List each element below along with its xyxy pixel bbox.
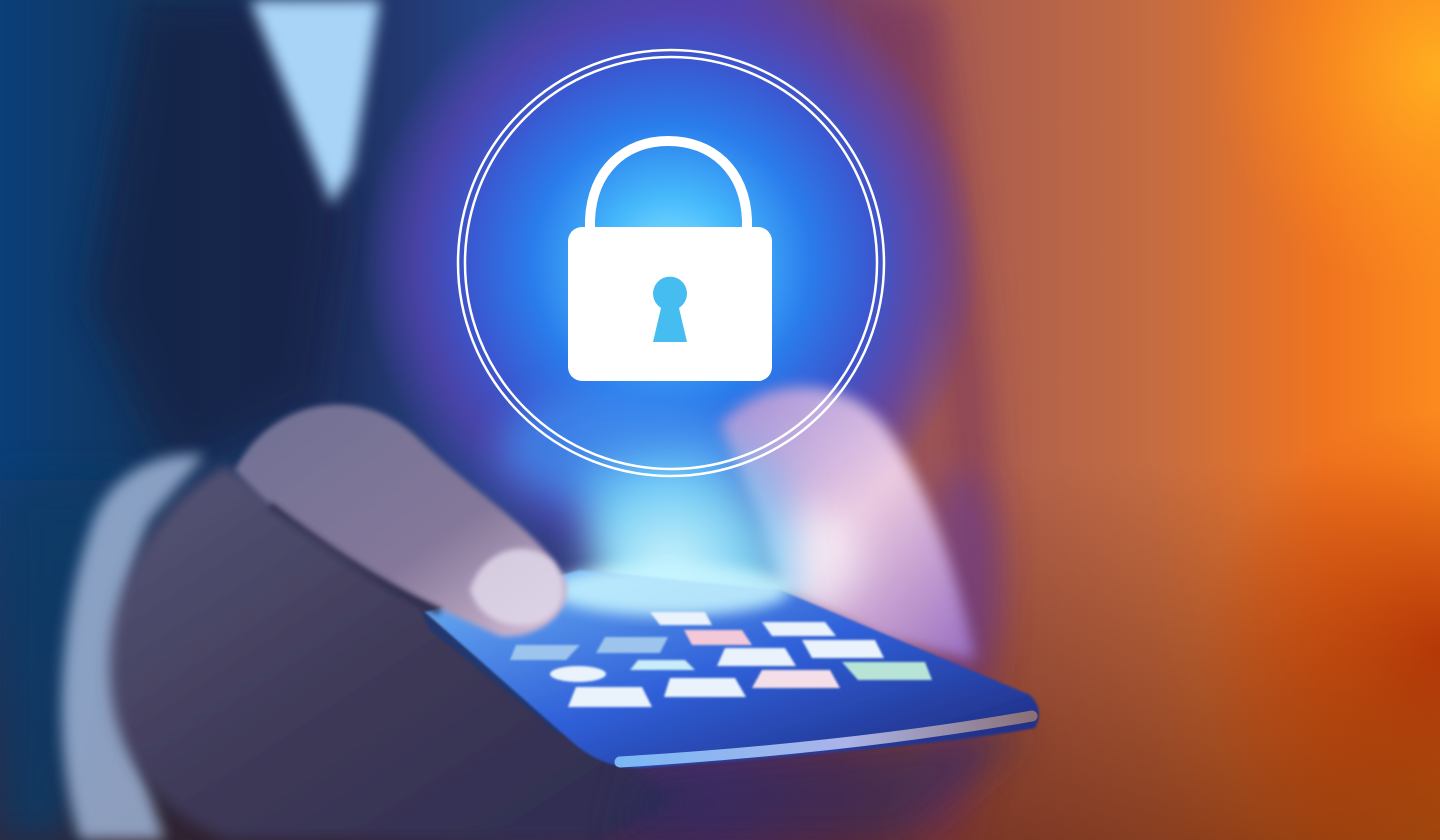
shirt cuff bbox=[62, 454, 205, 840]
thumb pressing the screen bbox=[235, 404, 567, 636]
thumbnail bbox=[470, 549, 563, 625]
glow behind the lock bbox=[361, 0, 981, 573]
double ring around the lock bbox=[458, 50, 884, 476]
light blue shirt bbox=[250, 0, 380, 205]
smartphone bbox=[420, 564, 1039, 840]
palm of the hand bbox=[110, 465, 680, 840]
phone side left bbox=[420, 610, 565, 735]
bright top of the screen bbox=[550, 564, 790, 616]
phone body bbox=[425, 570, 1039, 768]
padlock icon bbox=[568, 141, 772, 381]
shadow under the phone bbox=[620, 730, 1030, 840]
light beam rising from the screen bbox=[570, 440, 800, 610]
keyhole bbox=[653, 277, 687, 342]
glow spilling below the ring bbox=[500, 390, 740, 510]
crease under the thumb bbox=[270, 505, 440, 612]
shackle bbox=[590, 141, 747, 232]
suit jacket lapel bbox=[0, 0, 345, 840]
middle finger behind the phone bbox=[720, 387, 975, 660]
app icons bbox=[510, 612, 932, 707]
purple haze beside the finger bbox=[920, 470, 1000, 690]
phone edge bbox=[620, 716, 1032, 762]
lock body bbox=[568, 227, 772, 381]
